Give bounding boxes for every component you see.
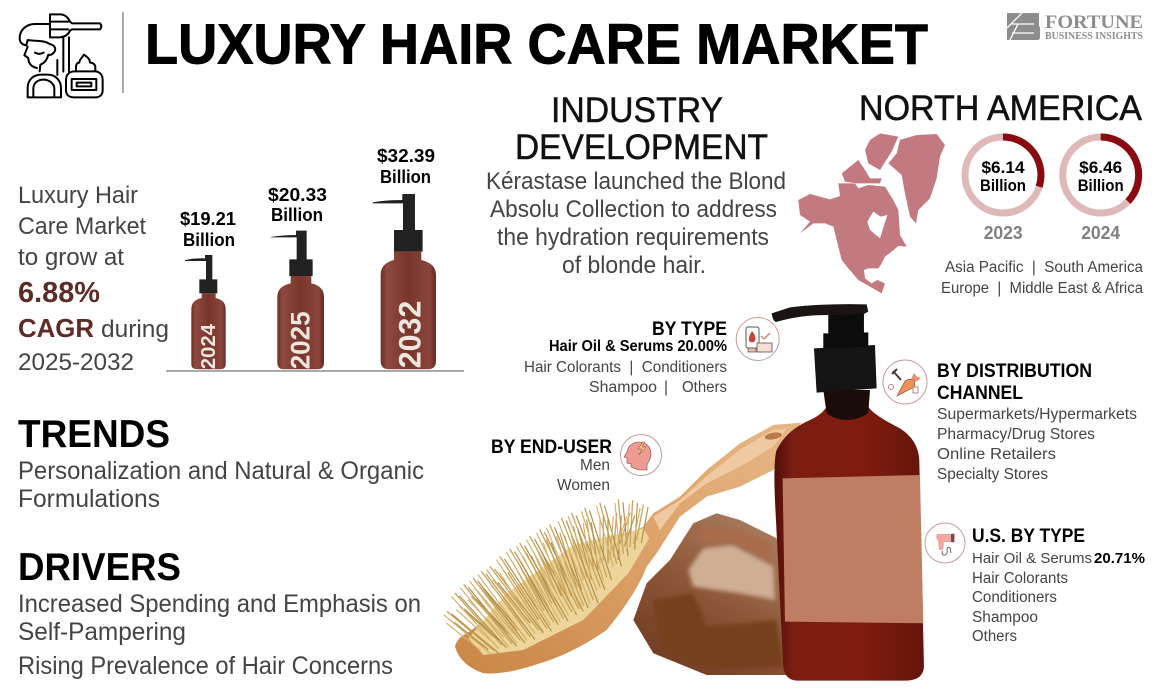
trends: Personalization and Natural & Organic — [18, 457, 424, 485]
by type — [524, 318, 779, 396]
title: LUXURY HAIR CARE MARKET — [145, 12, 928, 76]
by type: Hair Colorants | Conditioners — [524, 359, 727, 376]
by type: Hair Oil & Serums 20.00% — [549, 338, 727, 355]
industry development: the hydration requirements — [497, 224, 769, 251]
drivers — [18, 546, 421, 680]
donut: 2024: 2024 — [1081, 223, 1120, 243]
value label 2032 — [377, 146, 435, 187]
other regions: Europe | Middle East & Africa — [941, 280, 1143, 297]
logo: Fortune Business Insights: BUSINESS INSIGHTS — [1045, 31, 1143, 42]
donut: 2024: Billion — [1078, 176, 1124, 195]
other regions: Asia Pacific | South America — [945, 259, 1143, 276]
by distribution channel: Online Retailers — [937, 446, 1056, 463]
CAGR text block: 6.88% — [18, 277, 100, 309]
industry development: DEVELOPMENT — [515, 128, 768, 167]
bar chart: bottles by year — [166, 146, 464, 371]
CAGR text block: during — [101, 316, 169, 343]
CAGR text block: to grow at — [18, 244, 124, 271]
industry development: Absolu Collection to address — [490, 196, 777, 223]
value label 2025: Billion — [271, 205, 323, 225]
value label 2024: Billion — [183, 230, 235, 250]
donut: 2023: 2023 — [984, 223, 1023, 243]
u.s. by type: 20.71% — [1094, 550, 1145, 567]
u.s. by type: Hair Oil & Serums — [972, 550, 1092, 567]
drivers: Increased Spending and Emphasis on — [18, 590, 421, 618]
bottle 2025 — [271, 231, 324, 369]
by distribution channel: Pharmacy/Drug Stores — [937, 426, 1095, 443]
value label 2024 — [180, 209, 236, 250]
icon: hair dryer — [925, 523, 965, 563]
drivers: Self-Pampering — [18, 618, 186, 646]
CAGR text block: 2025-2032 — [18, 349, 134, 376]
by end-user: Women — [557, 477, 610, 494]
by distribution channel: CHANNEL — [937, 383, 1023, 404]
other regions — [941, 259, 1143, 297]
photo: pump bottle — [772, 304, 924, 681]
donut: 2023 — [965, 137, 1041, 243]
industry development: Kérastase launched the Blond — [486, 168, 786, 195]
trends: TRENDS — [18, 413, 170, 456]
north america heading: NORTH AMERICA — [859, 89, 1143, 128]
CAGR text block: CAGR — [18, 313, 94, 343]
industry development: INDUSTRY — [551, 91, 723, 130]
bottle 2025: 2025 — [285, 311, 315, 369]
by type: | — [664, 379, 668, 396]
by type: Others — [682, 379, 727, 396]
value label 2024: $19.21 — [180, 209, 236, 229]
value label 2025: $20.33 — [268, 185, 327, 205]
donut: 2024 — [1063, 137, 1139, 243]
logo: Fortune Business Insights — [1007, 12, 1143, 42]
by end-user — [491, 434, 662, 494]
bottle 2032 — [373, 194, 436, 369]
by distribution channel — [883, 360, 1137, 483]
u.s. by type: U.S. BY TYPE — [972, 526, 1085, 547]
photo: hairbrush — [444, 423, 802, 674]
u.s. by type: Conditioners — [972, 589, 1057, 606]
industry development — [486, 91, 786, 279]
bottle 2032: 2032 — [393, 301, 428, 368]
bottle 2024 — [185, 255, 226, 369]
by distribution channel: Specialty Stores — [937, 466, 1048, 483]
CAGR text block: Care Market — [18, 213, 146, 240]
CAGR text block — [18, 182, 169, 376]
by end-user: Men — [580, 457, 610, 474]
by distribution channel: BY DISTRIBUTION — [937, 361, 1092, 382]
icon: carrot and fork — [883, 360, 927, 404]
donut: 2024: $6.46 — [1079, 158, 1122, 177]
map: North America — [798, 133, 945, 293]
by type: BY TYPE — [652, 319, 727, 340]
by type: Shampoo — [589, 379, 657, 396]
u.s. by type: Hair Colorants — [972, 570, 1068, 587]
bottle 2024: 2024 — [198, 324, 220, 369]
icon: hair oil tube and jar — [736, 318, 779, 360]
value label 2032: $32.39 — [377, 146, 435, 166]
drivers: Rising Prevalence of Hair Concerns — [18, 652, 393, 680]
icon: stylist with brush and cream jar — [20, 14, 103, 97]
donut: 2023: $6.14 — [982, 158, 1025, 177]
trends — [18, 413, 424, 513]
industry development: of blonde hair. — [562, 252, 706, 279]
by distribution channel: Supermarkets/Hypermarkets — [937, 406, 1137, 423]
photo: rock — [633, 513, 790, 675]
by end-user: BY END-USER — [491, 437, 612, 458]
logo: Fortune Business Insights: FORTUNE — [1045, 12, 1143, 33]
drivers: DRIVERS — [18, 546, 181, 589]
u.s. by type: Others — [972, 628, 1017, 645]
value label 2025 — [268, 185, 327, 225]
CAGR text block: Luxury Hair — [18, 182, 138, 209]
u.s. by type — [925, 523, 1145, 645]
value label 2032: Billion — [380, 167, 431, 187]
trends: Formulations — [18, 485, 160, 513]
donut: 2023: Billion — [980, 176, 1026, 195]
u.s. by type: Shampoo — [972, 609, 1038, 626]
icon: head with lightning — [620, 434, 662, 476]
